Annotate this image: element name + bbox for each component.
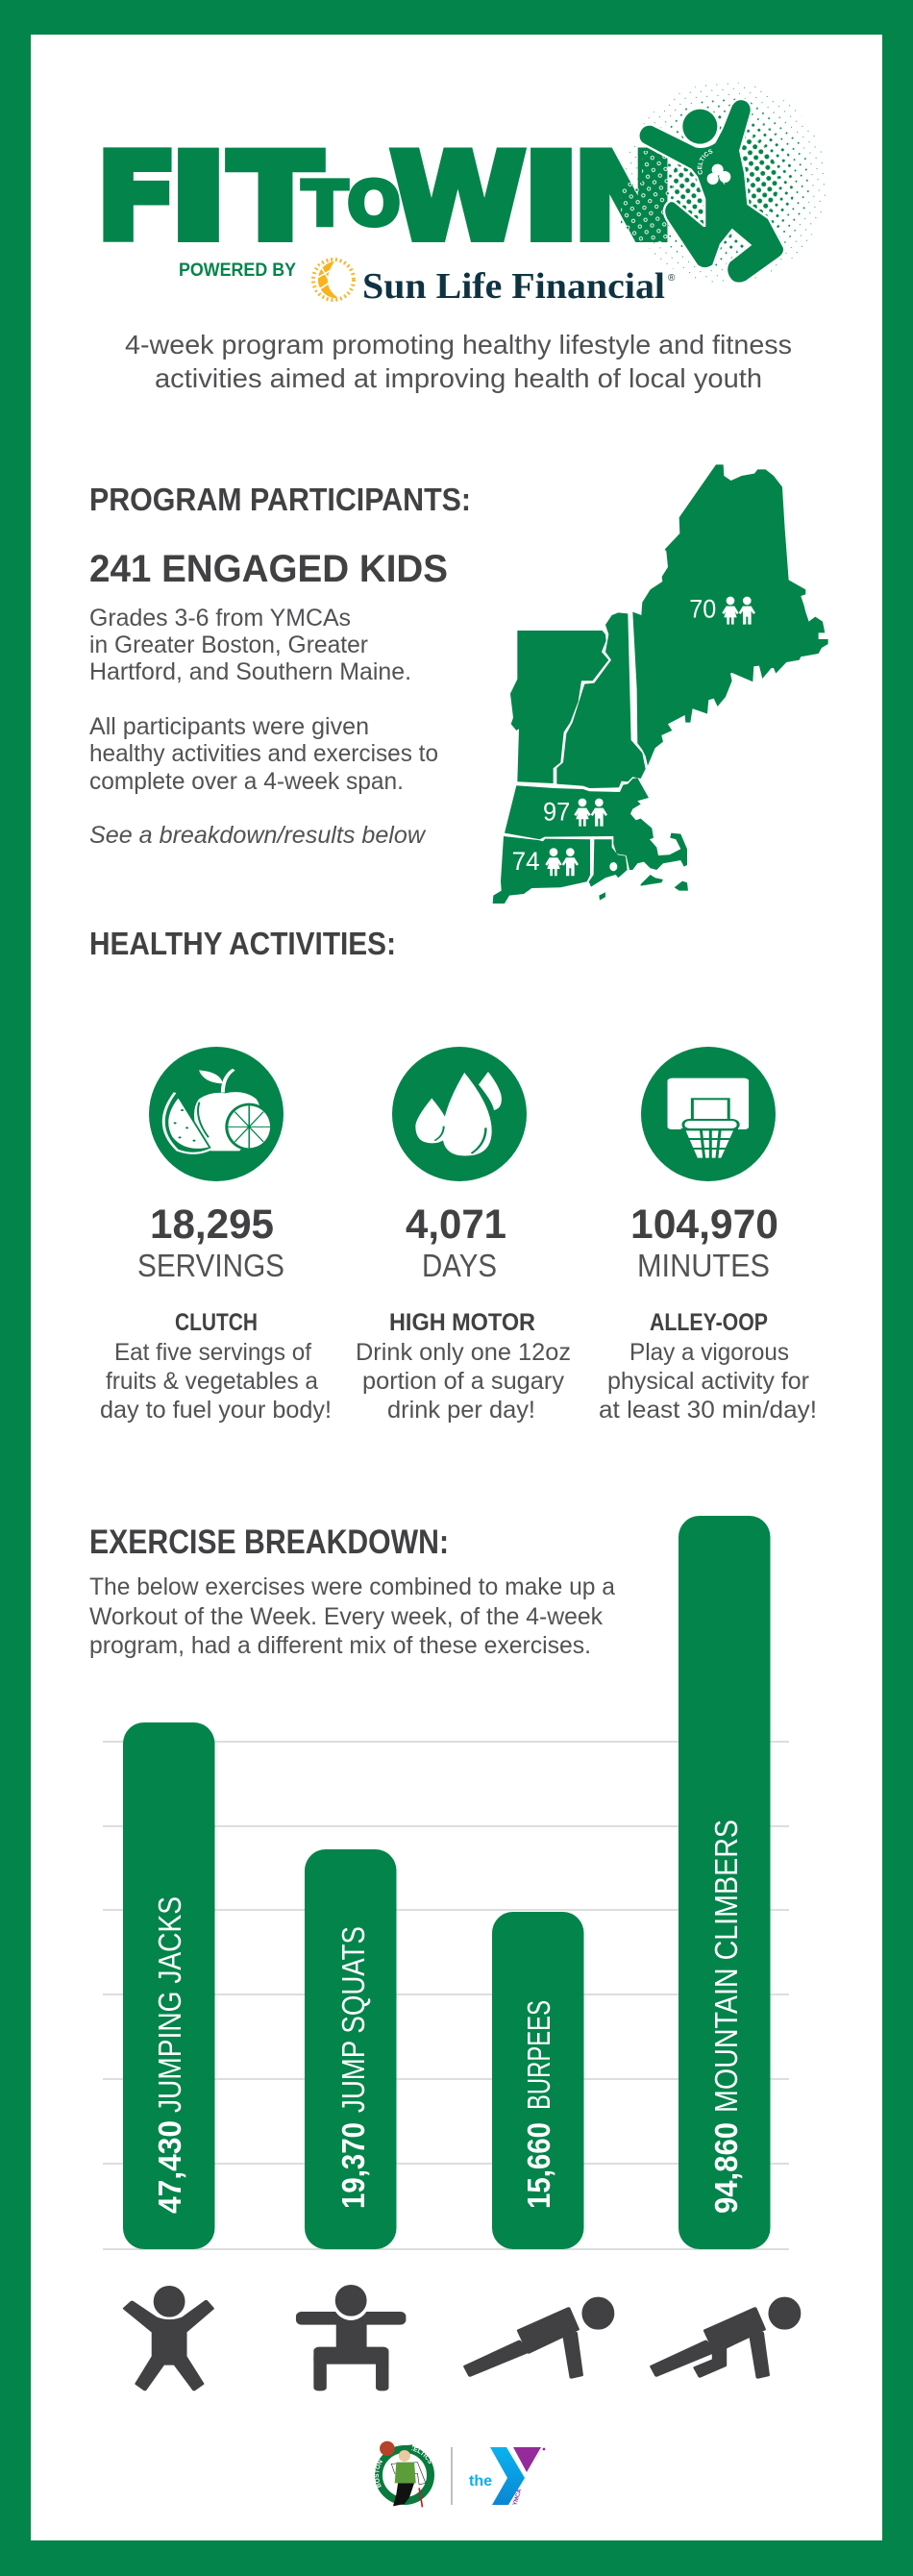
label: Connecticut 74 (512, 847, 579, 876)
panel: servings (100, 1047, 332, 1424)
description: physical activity for (607, 1368, 809, 1395)
unit: SERVINGS (137, 1248, 284, 1283)
label: Massachusetts 97 (543, 797, 607, 827)
bar: burpees: BURPEES (521, 2000, 556, 2110)
panel: days (356, 1047, 571, 1424)
wordmark FIT TO WIN: O (347, 169, 401, 240)
label: Maine 70 (689, 595, 755, 625)
Connecticut (493, 836, 590, 904)
map: New England (493, 464, 828, 904)
value: 18,295 (150, 1201, 274, 1248)
heading: exercise breakdown: EXERCISE BREAKDOWN: (89, 1523, 449, 1561)
Rhode Island (589, 839, 628, 887)
icon: fruit (149, 1047, 284, 1181)
wordmark FIT TO WIN (96, 129, 675, 267)
YMCA logo: the (469, 2473, 492, 2489)
panel: program participants (89, 482, 471, 849)
Celtics logo (375, 2441, 434, 2507)
Fit to Win logo (96, 83, 826, 283)
description: drink per day! (387, 1397, 535, 1424)
exercise description (89, 1573, 615, 1659)
description: Hartford, and Southern Maine. (89, 658, 411, 685)
New Hampshire (556, 612, 646, 788)
value: 4,071 (406, 1201, 506, 1248)
unit: MINUTES (637, 1248, 770, 1283)
bar: mountain climbers (679, 1516, 771, 2249)
description: Play a vigorous (629, 1339, 789, 1366)
bar: jump squats: JUMP SQUATS (335, 1926, 371, 2113)
exercise description: The below exercises were combined to make up a (89, 1573, 615, 1600)
exercise description: program, had a different mix of these exercises. (89, 1632, 591, 1659)
exercise description: Workout of the Week. Every week, of the 4-week (89, 1603, 603, 1630)
icon: Sun Life sun (313, 260, 354, 300)
powered by: POWERED BY (179, 260, 296, 281)
icon: burpee (465, 2298, 612, 2377)
icon: water drops (392, 1047, 527, 1181)
bar chart (103, 1516, 789, 2249)
jumping figure (639, 98, 784, 283)
wordmark FIT TO WIN: N (573, 129, 675, 267)
engaged kids count: 241 ENGAGED KIDS (89, 548, 448, 590)
panel: minutes (599, 1047, 817, 1424)
description: All participants were given (89, 713, 369, 740)
wordmark FIT TO WIN: I (521, 129, 581, 267)
leprechaun (380, 2441, 426, 2507)
title: CLUTCH (175, 1309, 258, 1336)
bar: jumping jacks: JUMPING JACKS (152, 1896, 187, 2113)
Maine (632, 464, 828, 766)
label: Massachusetts 97: 97 (543, 797, 570, 826)
description: Eat five servings of (114, 1339, 311, 1366)
description: Grades 3-6 from YMCAs (89, 605, 351, 632)
description: healthy activities and exercises to (89, 740, 438, 767)
icon: mountain climber (652, 2298, 799, 2377)
label: Maine 70: 70 (689, 595, 716, 624)
subtitle: activities aimed at improving health of local youth (155, 363, 762, 393)
Vermont (510, 631, 608, 783)
description (356, 1339, 571, 1424)
heading: healthy activities: HEALTHY ACTIVITIES: (89, 926, 396, 961)
title: HIGH MOTOR (389, 1309, 535, 1336)
label: Connecticut 74: 74 (512, 847, 540, 876)
heading: PROGRAM PARTICIPANTS: (89, 482, 471, 517)
Sun Life Financial: ® (668, 273, 676, 284)
description (599, 1339, 817, 1424)
halftone over N (621, 151, 669, 242)
Massachusetts (505, 778, 687, 870)
description: Drink only one 12oz (356, 1339, 571, 1366)
bar: jumping jacks (123, 1722, 215, 2249)
wordmark FIT TO WIN: W (390, 129, 526, 267)
bar: jump squats (305, 1849, 396, 2249)
description: day to fuel your body! (100, 1397, 332, 1424)
bar: burpees: 15,660 (521, 2122, 556, 2209)
wordmark FIT TO WIN: T (229, 129, 322, 267)
description (89, 605, 438, 849)
value: 104,970 (630, 1201, 778, 1248)
YMCA logo (469, 2447, 545, 2507)
description: at least 30 min/day! (599, 1397, 817, 1424)
subtitle: 4-week program promoting healthy lifestyle and fitness (125, 330, 792, 359)
shamrock (707, 164, 730, 185)
title: ALLEY-OOP (650, 1309, 768, 1336)
YMCA logo: YMCA (512, 2488, 524, 2507)
exercise icons (125, 2284, 799, 2390)
arc text (375, 2446, 431, 2488)
description: fruits & vegetables a (106, 1368, 318, 1395)
bar: mountain climbers: 94,860 (708, 2122, 744, 2214)
bar: burpees (492, 1912, 584, 2249)
description: complete over a 4-week span. (89, 768, 404, 795)
islands (599, 875, 688, 901)
arc text: CELTICS (411, 2446, 431, 2465)
bar: jumping jacks: 47,430 (152, 2120, 187, 2214)
icon: jumping jack (125, 2284, 212, 2390)
halftone burst (625, 82, 827, 284)
arc text: BOSTON (375, 2460, 382, 2488)
bar: jump squats: 19,370 (335, 2122, 371, 2209)
bar: mountain climbers: MOUNTAIN CLIMBERS (708, 1820, 744, 2113)
wordmark FIT TO WIN: F (96, 129, 178, 267)
celtics arc text: CELTICS (698, 149, 713, 175)
Sun Life Financial: Sun Life Financial (362, 266, 665, 307)
icon: squat (298, 2284, 404, 2390)
unit: DAYS (422, 1248, 497, 1283)
wordmark FIT TO WIN: T (302, 169, 348, 240)
divider (451, 2447, 453, 2505)
description: portion of a sugary (362, 1368, 564, 1395)
description: See a breakdown/results below (89, 822, 427, 849)
description: in Greater Boston, Greater (89, 632, 368, 658)
description (100, 1339, 332, 1424)
wordmark FIT TO WIN: I (168, 129, 229, 267)
subtitle (125, 330, 792, 393)
icon: basketball hoop (641, 1047, 776, 1181)
